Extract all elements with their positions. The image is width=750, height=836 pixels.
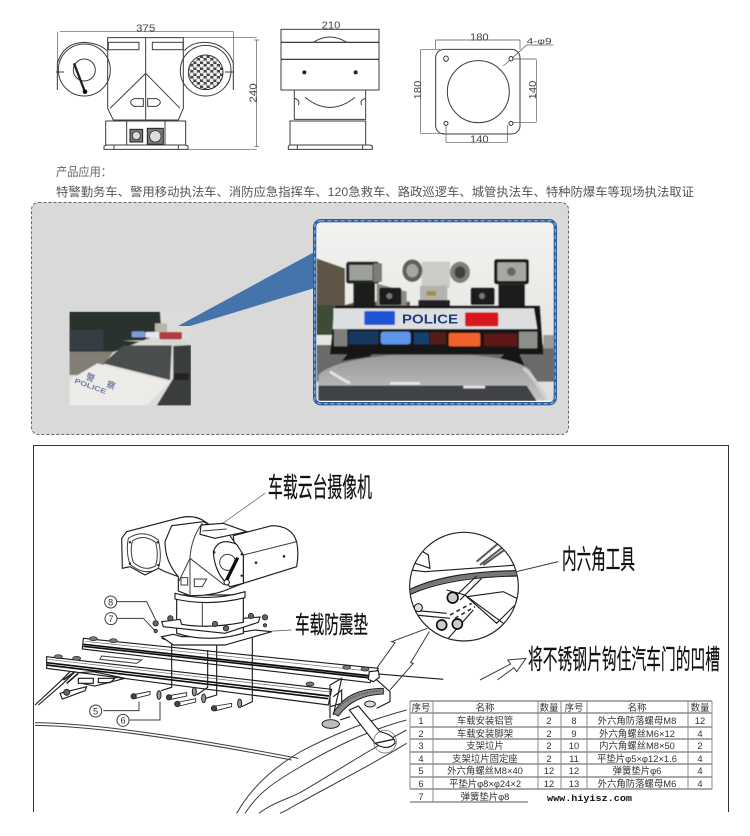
bar end cap bbox=[368, 671, 379, 682]
table rows: 弹簧垫片φ6 bbox=[613, 765, 661, 776]
table rows: 4 bbox=[418, 753, 424, 764]
table rows: 外六角螺丝M8×40 bbox=[447, 765, 523, 776]
table rows: 平垫片φ5×φ12×1.6 bbox=[597, 753, 677, 764]
right side plate bbox=[213, 542, 243, 587]
label: hex tool: 内六角工具 bbox=[562, 545, 635, 575]
leader lines to labels bbox=[213, 493, 292, 632]
drawing: camera front view with dimensions bbox=[56, 23, 260, 149]
watermark url: www.hiyisz.com bbox=[547, 793, 632, 804]
table header: 序号 bbox=[565, 702, 583, 713]
detail callout: hex tool magnifier bbox=[368, 532, 558, 690]
mounting plate top bbox=[162, 617, 260, 633]
arrow: zoom callout wedge bbox=[178, 250, 318, 326]
table rows: 10 bbox=[569, 740, 579, 751]
table rows: 3 bbox=[418, 740, 424, 751]
mounting plate and pad bbox=[162, 632, 262, 644]
left foot bracket bbox=[35, 672, 125, 705]
table rows: 12 bbox=[544, 765, 554, 776]
hood lettering: 警 察 bbox=[85, 371, 117, 391]
table header: 数量 bbox=[540, 702, 558, 713]
label: anti-vibration pad: 车载防震垫 bbox=[295, 612, 368, 639]
table rows: 外六角防落螺母M6 bbox=[598, 778, 676, 789]
table rows: 4 bbox=[697, 765, 703, 776]
table rows: 4 bbox=[697, 753, 703, 764]
table rows: 4 bbox=[697, 778, 703, 789]
table rows: 9 bbox=[571, 728, 577, 739]
arrow: to door groove label bbox=[480, 658, 526, 680]
dimension: 180 height: 180 bbox=[413, 80, 424, 99]
dimension: 375: 375 bbox=[136, 23, 156, 34]
camera unit bbox=[122, 517, 298, 645]
callout 8: 8 bbox=[108, 597, 113, 607]
dimension: 4-φ9 holes: 4-φ9 bbox=[527, 36, 552, 46]
table rows: 2 bbox=[546, 715, 552, 726]
panel: vehicle application photos bbox=[32, 202, 568, 434]
table rows: 1 bbox=[418, 715, 424, 726]
table rows: 外六角防落螺母M8 bbox=[598, 715, 676, 726]
photo: police car bbox=[69, 312, 191, 406]
table rows: 内六角螺丝M8×50 bbox=[599, 740, 675, 751]
base collar bbox=[175, 592, 245, 603]
callout 6 bbox=[117, 714, 129, 726]
label: POLICE: POLICE bbox=[402, 312, 458, 327]
pedestal bbox=[177, 595, 243, 638]
table rows: 2 bbox=[546, 753, 552, 764]
table rows: 6 bbox=[418, 778, 424, 789]
yoke bbox=[165, 522, 243, 596]
right clamp and door strap bbox=[322, 678, 396, 753]
drawing: mounting plate with dimensions bbox=[413, 33, 553, 145]
vehicle roof outline bbox=[35, 710, 407, 813]
leader: camera to lower table bbox=[378, 674, 443, 679]
table rows: 支架垃片 bbox=[466, 740, 504, 751]
anti-vibration pad bbox=[162, 630, 272, 645]
leader: hex tool bbox=[517, 562, 558, 572]
table rows: 11 bbox=[569, 753, 579, 764]
right housing bbox=[233, 526, 298, 583]
photo: police car: POLICE bbox=[73, 378, 107, 396]
table rows: 7 bbox=[418, 791, 424, 802]
callout 8 bbox=[105, 596, 117, 608]
front mounting bar bbox=[47, 655, 332, 705]
dimension: 240: 240 bbox=[249, 83, 260, 103]
table: parts list bbox=[408, 697, 722, 810]
text block: product applications bbox=[56, 164, 694, 199]
table rows: 8 bbox=[571, 715, 577, 726]
dimension: 210: 210 bbox=[322, 21, 341, 32]
callout 5 bbox=[90, 705, 102, 717]
table rows: 12 bbox=[544, 778, 554, 789]
panel: installation diagram bbox=[34, 446, 728, 813]
table rows: 2 bbox=[697, 740, 703, 751]
dimension: 180 width: 180 bbox=[470, 33, 489, 44]
table rows: 13 bbox=[569, 778, 579, 789]
drawing: camera side view bbox=[281, 21, 379, 149]
label: vehicle PTZ camera: 车载云台摄像机 bbox=[268, 473, 372, 503]
bolts and leaders bbox=[161, 632, 252, 707]
table rows: 车载安装铝管 bbox=[457, 715, 513, 726]
table rows: 12 bbox=[695, 715, 705, 726]
dimension: 140 height: 140 bbox=[528, 80, 539, 99]
text block: product applications: 特警勤务车、警用移动执法车、消防应急指挥车、120急救车、路政巡逻车、城管执法车、特种防爆车等现场执法取证 bbox=[56, 184, 694, 199]
table rows: 平垫片φ8×φ24×2 bbox=[449, 778, 521, 789]
diagram: mounting bars, bolts and vehicle roof bbox=[35, 493, 407, 813]
table header: 名称 bbox=[628, 702, 646, 713]
table header: 序号 bbox=[412, 702, 430, 713]
text block: product applications: 产品应用： bbox=[56, 164, 112, 179]
rear mounting bar bbox=[82, 637, 378, 683]
table rows: 车载安装脚架 bbox=[457, 728, 513, 739]
table header: 数量 bbox=[691, 702, 709, 713]
table header: 名称 bbox=[476, 702, 494, 713]
left housing bbox=[122, 517, 215, 577]
callout 7 bbox=[105, 613, 117, 625]
table rows: 5 bbox=[418, 765, 424, 776]
table rows: 12 bbox=[569, 765, 579, 776]
table rows: 4 bbox=[697, 728, 703, 739]
table header bbox=[412, 702, 709, 713]
table rows: 弹簧垫片φ8 bbox=[461, 791, 509, 802]
callout 6: 6 bbox=[120, 716, 125, 726]
table rows: 2 bbox=[418, 728, 424, 739]
table rows: 2 bbox=[546, 728, 552, 739]
table rows: 外六角螺丝M6×12 bbox=[599, 728, 675, 739]
table rows: 2 bbox=[546, 740, 552, 751]
callout 7: 7 bbox=[108, 614, 113, 624]
zigzag pointer to magnifier bbox=[377, 628, 429, 690]
table rows bbox=[418, 715, 705, 802]
dimension: 140 width: 140 bbox=[470, 134, 489, 145]
photo: police light bar with camera inset bbox=[314, 220, 556, 404]
table rows: 支架垃片固定座 bbox=[452, 753, 518, 764]
callout 5: 5 bbox=[93, 706, 98, 716]
